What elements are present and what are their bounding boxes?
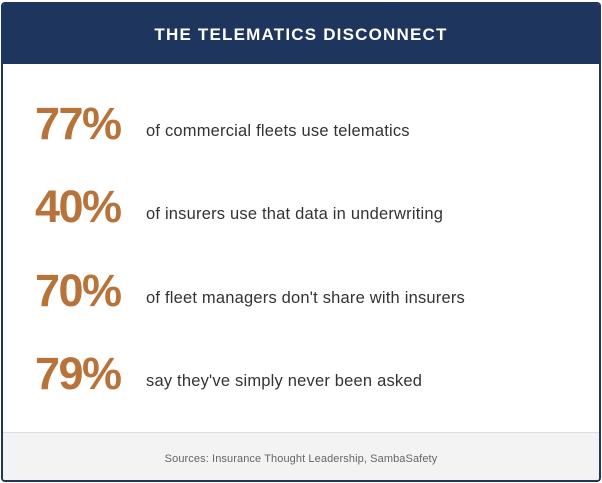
stat row 4: say they've simply never been asked — [146, 372, 422, 390]
footer sources — [3, 432, 599, 481]
stat row 4: 79% — [35, 348, 121, 399]
stat row 2 — [35, 181, 443, 232]
stat row 3: of fleet managers don't share with insurers — [146, 289, 465, 307]
stat row 4 — [35, 348, 422, 399]
stat row 2: 40% — [35, 181, 121, 232]
stat row 1: of commercial fleets use telematics — [146, 122, 410, 140]
stat row 2: of insurers use that data in underwriting — [146, 205, 443, 223]
title header: THE TELEMATICS DISCONNECT — [154, 25, 448, 44]
stat row 1: 77% — [35, 98, 121, 149]
title header — [3, 4, 599, 64]
stat row 3: 70% — [35, 265, 121, 316]
footer sources: Sources: Insurance Thought Leadership, SambaSafety — [165, 453, 437, 465]
stat row 1 — [35, 98, 410, 149]
stat row 3 — [35, 265, 465, 316]
